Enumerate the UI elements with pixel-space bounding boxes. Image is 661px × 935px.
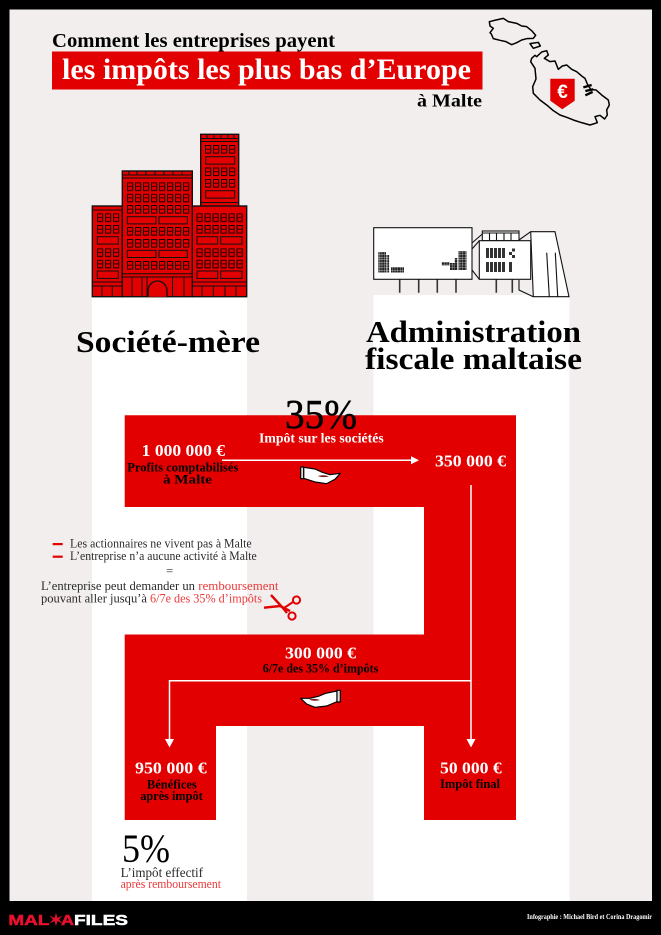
title line 1: Comment les entreprises payent (52, 30, 335, 52)
value: final tax: Impôt final (440, 777, 501, 791)
title (52, 30, 482, 111)
value: profit after tax: 950 000 € (135, 758, 207, 777)
right wing (192, 206, 247, 297)
stat: 35% corporate tax: 35% (285, 391, 357, 437)
value: accounted profits: Profits comptabilisés (127, 461, 238, 475)
heading: tax administration: Administration (366, 314, 581, 349)
value: 350 000 €: 350 000 € (435, 452, 507, 471)
value: profit after tax: après impôt (140, 789, 204, 803)
icon: hand paying (301, 467, 340, 484)
heading: tax administration (365, 314, 582, 376)
icon: tax administration building (374, 228, 569, 297)
stat: 35% corporate tax: Impôt sur les sociétés (259, 431, 384, 446)
icon: scissors (264, 595, 300, 620)
text block: refund conditions: remboursement (198, 578, 279, 593)
value: final tax: 50 000 € (440, 758, 502, 777)
text block: refund conditions: Les actionnaires ne vivent pas à Malte (70, 536, 252, 550)
text block: refund conditions: = (166, 564, 173, 578)
value: refund 300 000 €: 300 000 € (285, 643, 357, 662)
tower (201, 134, 239, 206)
icon: map of Malta with euro shield (489, 18, 609, 125)
logo: Malta Files (8, 912, 128, 929)
icon: hand receiving (301, 690, 340, 707)
flow diagram shape (125, 415, 516, 820)
heading: tax administration: fiscale maltaise (365, 341, 582, 376)
value: profit after tax: Bénéfices (147, 777, 197, 791)
stat: 35% corporate tax (259, 391, 384, 446)
logo: Malta Files: MAL (8, 912, 49, 929)
heading: parent company: Société-mère (76, 324, 260, 359)
text block: refund conditions (41, 536, 279, 606)
stat: 5% effective tax (121, 826, 221, 891)
text block: refund conditions: pouvant aller jusqu’à (41, 591, 147, 606)
value: refund 300 000 €: 6/7e des 35% d’impôts (263, 662, 378, 676)
central block (122, 171, 192, 297)
title line 3: à Malte (417, 91, 482, 111)
logo: Malta Files: FILES (74, 912, 128, 929)
title banner: les impôts les plus bas d’Europe (62, 53, 471, 86)
logo: Malta Files: A (61, 912, 74, 929)
text block: refund conditions: 6/7e des 35% d’impôts (150, 591, 262, 606)
text block: refund conditions: L’entreprise peut demander un (41, 578, 195, 593)
stat: 5% effective tax: après remboursement (121, 877, 221, 891)
value: accounted profits: à Malte (163, 472, 213, 486)
icon: map of Malta with euro shield: € (557, 82, 568, 103)
value: refund 300 000 € (263, 643, 378, 676)
value: final tax (440, 758, 502, 791)
value: accounted profits: 1 000 000 € (142, 441, 226, 460)
stat: 5% effective tax: 5% (122, 826, 170, 871)
value: accounted profits (127, 441, 238, 486)
arrow: tax split to final tax and refund (165, 485, 476, 748)
arrow: profits to tax (222, 456, 419, 464)
left wing (92, 206, 122, 297)
icon: parent company building (92, 134, 247, 297)
value: profit after tax (135, 758, 207, 803)
text block: refund conditions: L’entreprise n’a aucune activité à Malte (70, 549, 257, 563)
stat: 5% effective tax: L’impôt effectif (121, 866, 203, 881)
